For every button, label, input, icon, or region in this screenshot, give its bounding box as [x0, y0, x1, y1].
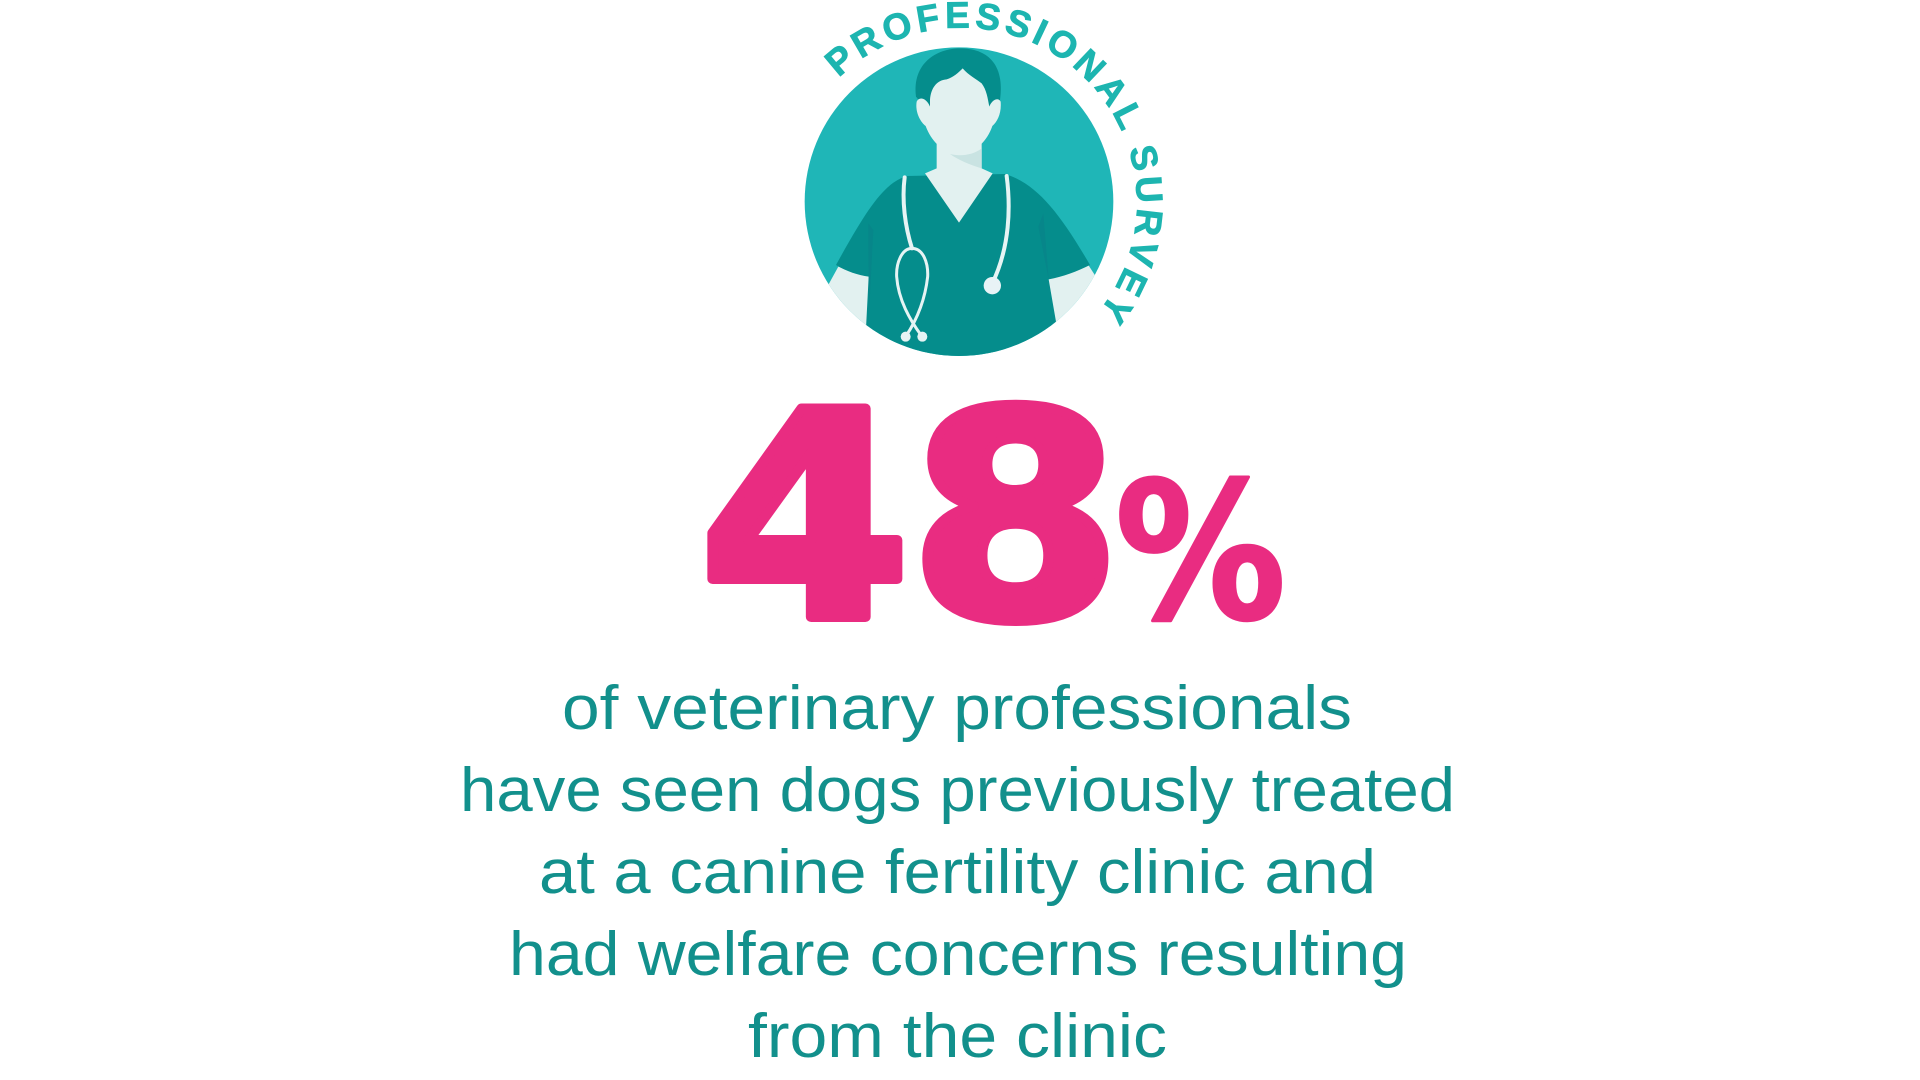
description text: at a canine fertility clinic and — [539, 838, 1376, 907]
headline figure: 48 percent: 4 — [699, 353, 911, 685]
stethoscope — [897, 176, 1009, 336]
face — [916, 68, 1001, 144]
description text — [460, 674, 1455, 1071]
headline figure: 48 percent: % — [1115, 442, 1286, 663]
neck — [925, 143, 993, 223]
description text: from the clinic — [748, 1002, 1167, 1071]
arms — [828, 266, 870, 328]
scrubs — [836, 174, 1090, 363]
headline figure: 48 percent — [699, 353, 1286, 685]
icon: veterinary professional in circle — [805, 47, 1113, 363]
description text: had welfare concerns resulting — [509, 920, 1407, 989]
headline figure: 48 percent: 8 — [909, 353, 1122, 685]
description text: of veterinary professionals — [562, 674, 1352, 743]
hair — [916, 48, 1001, 110]
description text: have seen dogs previously treated — [460, 756, 1455, 825]
badge label: professional survey: PROFESSIONAL SURVEY — [824, 2, 1163, 327]
